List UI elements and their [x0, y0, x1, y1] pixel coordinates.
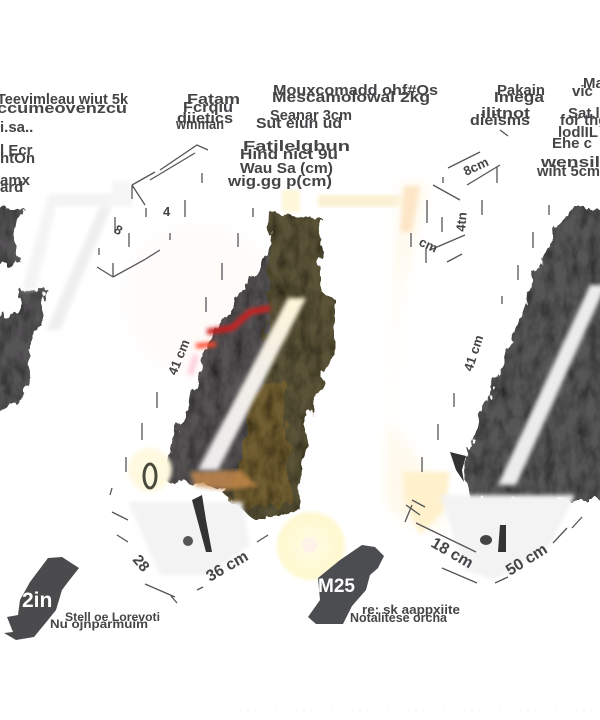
center fur brown patch — [232, 380, 290, 505]
right box label side: 4tn — [453, 211, 470, 232]
right text block: Imega — [494, 89, 545, 106]
badge caption left: Stell oe Lorevoti — [65, 610, 160, 624]
width label right: 50 cm — [503, 541, 551, 579]
grey wheel bottom right — [440, 495, 575, 580]
left text block: l Ecr — [0, 142, 33, 159]
soft pink backdrop — [125, 225, 275, 375]
center text block: Sut eiun ud — [256, 115, 342, 132]
badge caption left: Nu ojnparmuim — [50, 617, 148, 631]
center text block — [227, 82, 438, 190]
right box label left: cm — [417, 234, 440, 256]
badge caption left — [50, 610, 160, 631]
left wood wheel — [128, 448, 172, 492]
center text block: Seanar 3cm — [270, 107, 352, 124]
vertical height label right: 41 cm — [461, 333, 486, 373]
center fur orange band — [190, 470, 258, 490]
badge: 2in1 left: 2in — [22, 589, 52, 612]
red collar — [190, 308, 270, 375]
center text block: Mouxcomadd ohf#Os — [273, 82, 438, 99]
faint bottom marks — [240, 709, 600, 711]
left wheel hub — [144, 464, 156, 488]
left text block: ard — [0, 179, 23, 196]
left text block: amx — [0, 172, 31, 189]
far right text block: wensil — [540, 154, 600, 171]
left box label 8: 8 — [112, 222, 125, 238]
right text block: ilitnot — [481, 105, 530, 122]
left text block: htOn — [0, 150, 35, 167]
far right text block: vic — [572, 83, 593, 100]
center fur olive — [225, 215, 336, 520]
center text block: Mescamolowal 2kg — [272, 89, 430, 106]
width label left: 28 — [129, 552, 153, 575]
wood frame — [282, 182, 450, 535]
badge: 2in1 right — [308, 545, 384, 624]
badge caption right: Notalitese orcha — [350, 611, 448, 625]
center-left text block: Fatam — [187, 91, 240, 108]
center text block: Wau Sa (cm) — [240, 160, 333, 177]
right box label top: 8cm — [461, 154, 491, 179]
badge caption right — [350, 603, 460, 625]
badge caption right: re: sk aappxiite — [362, 603, 460, 617]
far right text block: Sat.l — [568, 105, 600, 122]
left text block: i.sa.. — [0, 119, 33, 136]
far right text block — [536, 75, 600, 180]
right frame strip — [498, 285, 600, 485]
far right text block: lodlIL — [558, 124, 598, 141]
left text block — [0, 91, 129, 196]
right text block: dieisms — [470, 112, 530, 129]
left box label 4: 4 — [163, 204, 171, 219]
vertical height label left: 41 cm — [165, 337, 193, 377]
center-left text block: wmman — [175, 116, 224, 133]
right fur — [462, 208, 600, 500]
far right text block: Ehe c — [552, 135, 592, 152]
front wood wheel — [275, 510, 347, 582]
center text block: Hind nict 9u — [240, 146, 338, 163]
depth label right: 18 cm — [428, 535, 476, 572]
front wheel hub — [302, 537, 318, 553]
badge: 2in1 right: M25 — [318, 576, 355, 597]
right text block — [470, 82, 545, 129]
right box dimension lines — [405, 130, 549, 522]
left handle frame — [22, 181, 132, 330]
center fur grey — [165, 240, 290, 490]
left text block: ccumeovenzcu — [0, 100, 127, 117]
center-left text block: Fcrqiu — [183, 99, 233, 116]
right text block: Pakain — [497, 82, 545, 99]
far right text block: wiht 5cm — [536, 163, 600, 180]
right far wheel — [450, 452, 466, 482]
left fur — [0, 206, 46, 410]
center text block: wig.gg p(cm) — [227, 173, 332, 190]
center-left text block — [175, 91, 240, 133]
bottom dimension lines — [110, 488, 582, 603]
grey wheel bottom left — [128, 495, 250, 575]
center-left text block: diietics — [177, 110, 233, 127]
left text block: Teevimleau wiut 5k — [0, 91, 129, 108]
depth label left: 36 cm — [204, 548, 251, 585]
center text block: Fatilelgbun — [243, 138, 350, 155]
left box dimension lines — [97, 145, 253, 472]
center frame strip — [198, 298, 306, 470]
badge: 2in1 left — [4, 557, 79, 640]
